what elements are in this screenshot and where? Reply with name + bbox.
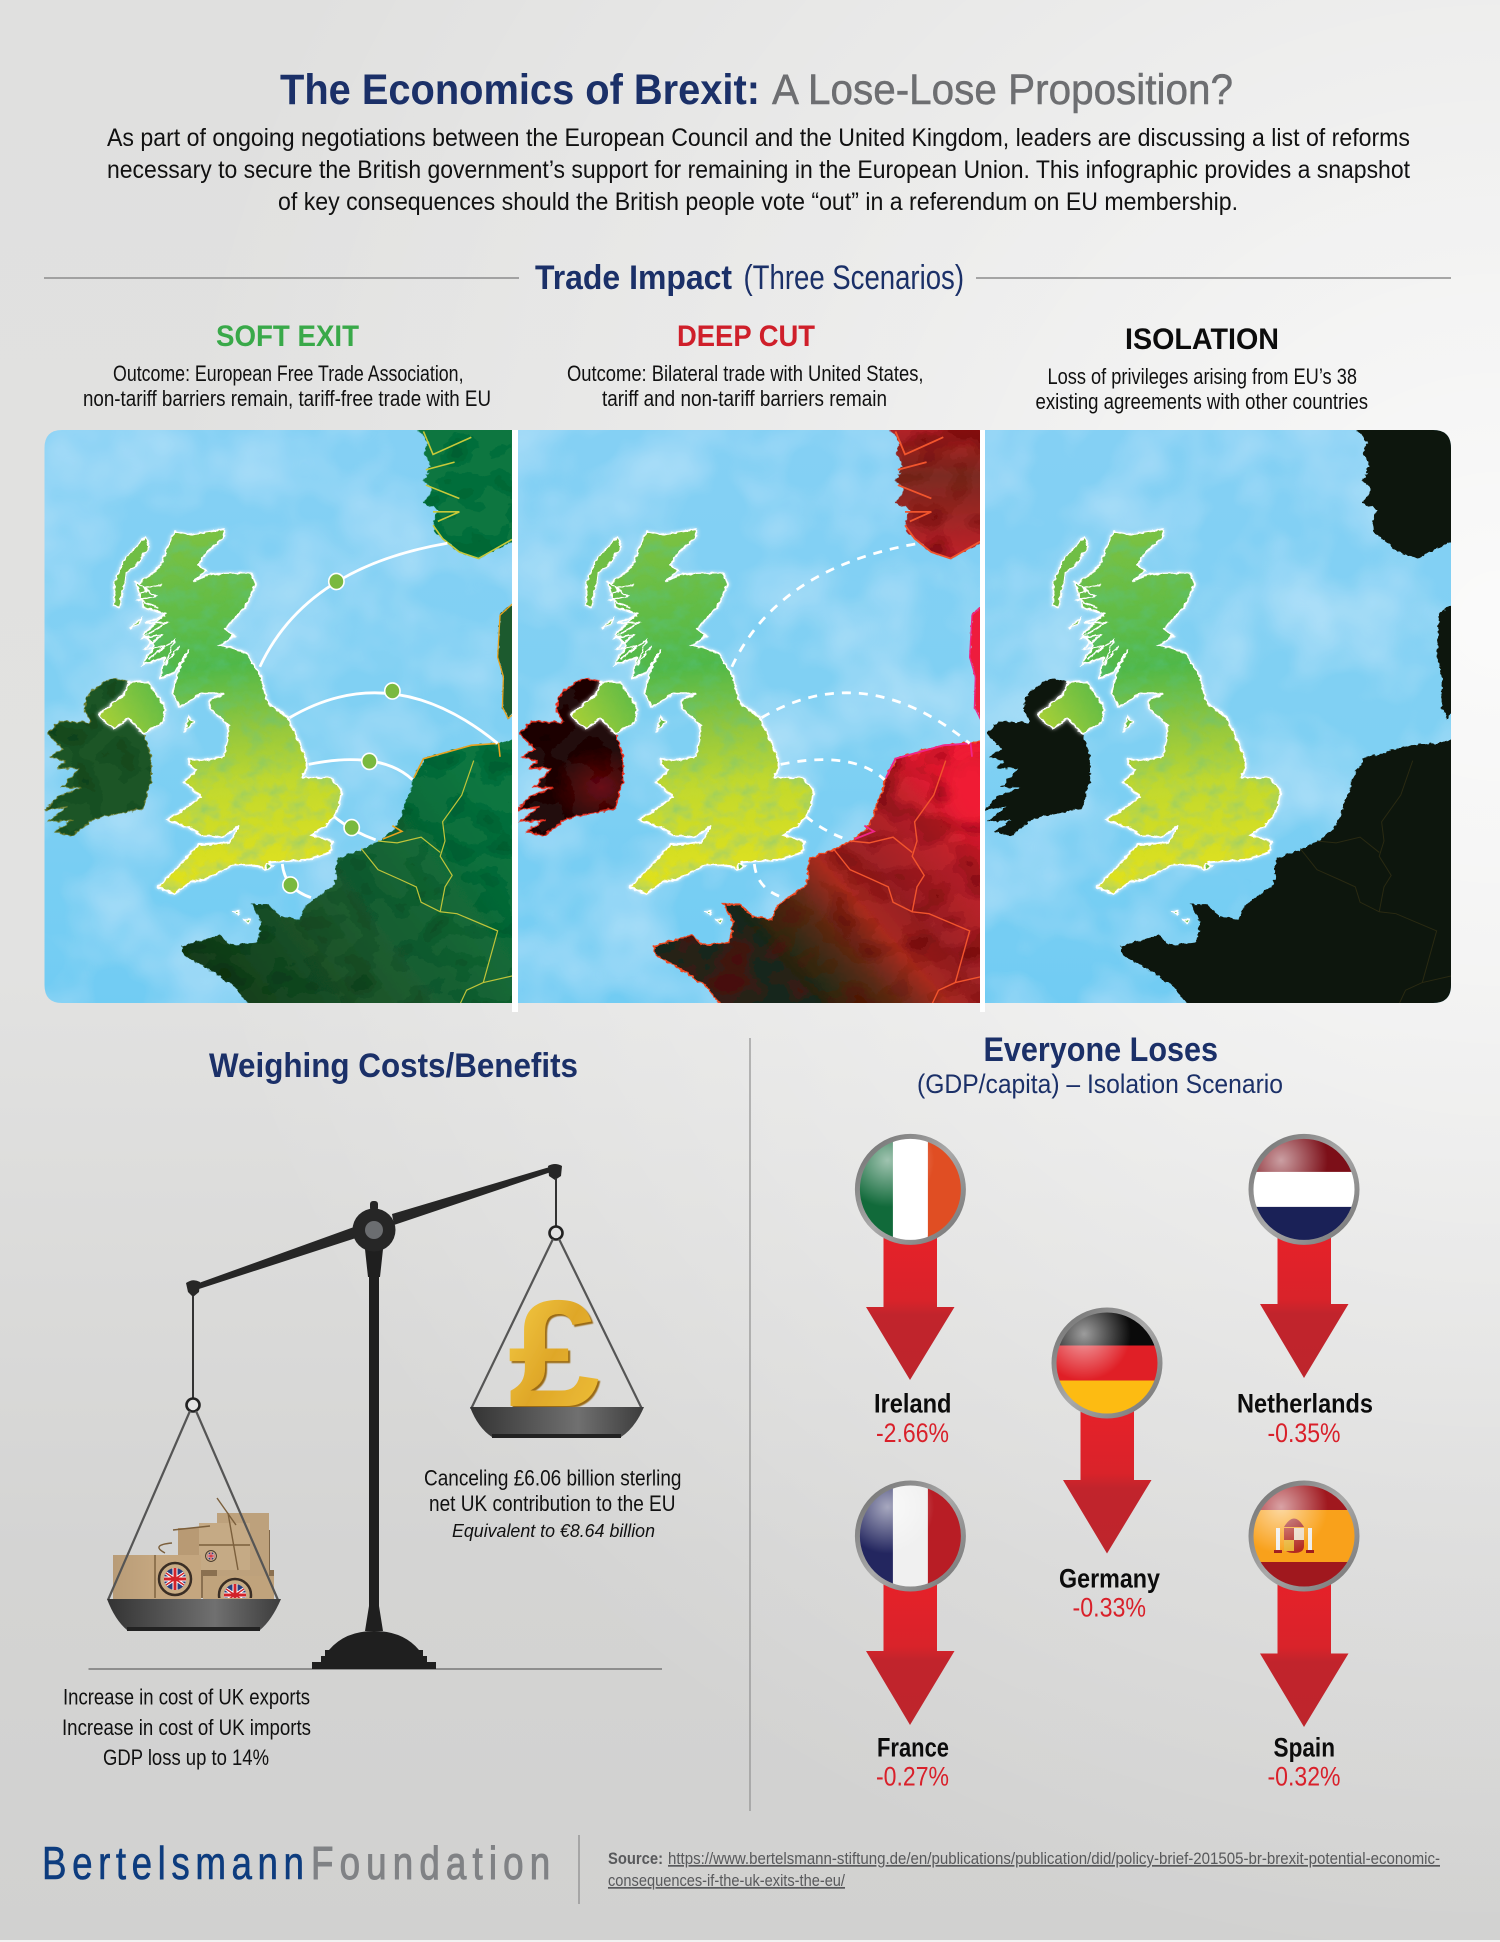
country: netherlands: Netherlands xyxy=(1237,1389,1373,1419)
scenario: soft exit xyxy=(83,320,491,411)
icon: gold pound sign: £ xyxy=(508,1269,600,1439)
left pan xyxy=(107,1296,281,1631)
country: france xyxy=(857,1483,963,1792)
intro text xyxy=(107,124,1410,216)
text: benefits: net UK contribution to the EU xyxy=(429,1491,676,1516)
chart: balance scale xyxy=(88,1164,662,1669)
country: ireland: Ireland xyxy=(874,1389,952,1419)
scenario: deep cut: DEEP CUT xyxy=(677,320,815,353)
country: germany: -0.33% xyxy=(1072,1592,1146,1622)
country: france: -0.27% xyxy=(876,1762,949,1792)
great britain and northern ireland xyxy=(98,529,342,924)
scenario: isolation: ISOLATION xyxy=(1125,323,1279,356)
left pan: parcels xyxy=(113,1498,274,1599)
heading: trade impact: Trade Impact xyxy=(535,259,732,297)
heading: everyone loses: Everyone Loses xyxy=(984,1031,1218,1069)
panel: soft exit map xyxy=(44,428,517,1006)
broken trade links xyxy=(732,543,970,898)
scenario: isolation xyxy=(1036,323,1368,414)
heading: everyone loses: (GDP/capita) – Isolation Scenario xyxy=(917,1069,1283,1099)
logo: bertelsmann foundation xyxy=(42,1837,550,1889)
scale stand xyxy=(312,1240,436,1669)
scenario: isolation: existing agreements with other countries xyxy=(1036,389,1368,414)
scale beam xyxy=(186,1164,562,1297)
text: costs: GDP loss up to 14% xyxy=(103,1745,269,1770)
scenario: soft exit: SOFT EXIT xyxy=(216,320,359,353)
text: benefits: Equivalent to €8.64 billion xyxy=(452,1521,655,1541)
scenario: deep cut xyxy=(567,320,924,411)
title: A Lose-Lose Proposition? xyxy=(772,66,1233,114)
title xyxy=(280,66,1233,114)
heading: trade impact xyxy=(44,259,1451,297)
country: germany: Germany xyxy=(1059,1564,1160,1594)
country: netherlands xyxy=(1237,1136,1373,1448)
title: The Economics of Brexit: xyxy=(280,66,760,114)
country: netherlands: -0.35% xyxy=(1268,1418,1340,1448)
heading: trade impact: (Three Scenarios) xyxy=(744,259,964,297)
logo: bertelsmann foundation: Foundation xyxy=(311,1837,550,1889)
scenario: isolation: Loss of privileges arising from EU’s 38 xyxy=(1048,364,1357,389)
icon: spanish crest xyxy=(1274,1518,1314,1553)
heading: weighing costs: Weighing Costs/Benefits xyxy=(209,1047,578,1085)
country: spain: Spain xyxy=(1274,1733,1335,1763)
text: benefits xyxy=(424,1466,682,1541)
country: spain: -0.32% xyxy=(1268,1762,1340,1792)
right pan xyxy=(470,1178,644,1438)
text: benefits: Canceling £6.06 billion sterling xyxy=(424,1466,682,1490)
panel: isolation map xyxy=(984,428,1456,1006)
text: costs: Increase in cost of UK imports xyxy=(62,1715,311,1740)
intro text: As part of ongoing negotiations between the European Council and the United Kingdom, leaders are discussing a list of reforms xyxy=(107,124,1410,152)
footer divider xyxy=(578,1835,580,1904)
white map dividers xyxy=(512,430,985,1012)
scenario: deep cut: Outcome: Bilateral trade with United States, xyxy=(567,361,924,386)
country: germany xyxy=(1054,1310,1160,1622)
source citation: Source: xyxy=(608,1849,663,1868)
panel: deep cut map xyxy=(517,428,998,1006)
icon: link dots xyxy=(283,573,400,893)
great britain and northern ireland xyxy=(570,529,814,924)
scenario: deep cut: tariff and non-tariff barriers remain xyxy=(602,386,887,411)
scenario: soft exit: non-tariff barriers remain, tariff-free trade with EU xyxy=(83,386,491,411)
source citation: consequences-if-the-uk-exits-the-eu/ xyxy=(608,1871,845,1890)
intro text: necessary to secure the British government’s support for remaining in the European Union. This infographic provides a snapshot xyxy=(107,156,1410,184)
country: ireland: -2.66% xyxy=(876,1418,949,1448)
great britain and northern ireland xyxy=(1037,529,1281,924)
heading: everyone loses xyxy=(917,1031,1283,1099)
intro text: of key consequences should the British people vote “out” in a referendum on EU membership. xyxy=(278,188,1238,216)
logo: bertelsmann foundation: Bertelsmann xyxy=(42,1837,304,1889)
scenario: soft exit: Outcome: European Free Trade Association, xyxy=(113,361,464,386)
text: costs xyxy=(62,1684,311,1770)
country: france: France xyxy=(877,1733,949,1763)
country: ireland xyxy=(857,1136,963,1448)
country: spain xyxy=(1251,1483,1357,1792)
trade links xyxy=(260,543,498,898)
source citation xyxy=(608,1849,1440,1890)
centre divider xyxy=(749,1038,751,1811)
text: costs: Increase in cost of UK exports xyxy=(63,1684,310,1710)
